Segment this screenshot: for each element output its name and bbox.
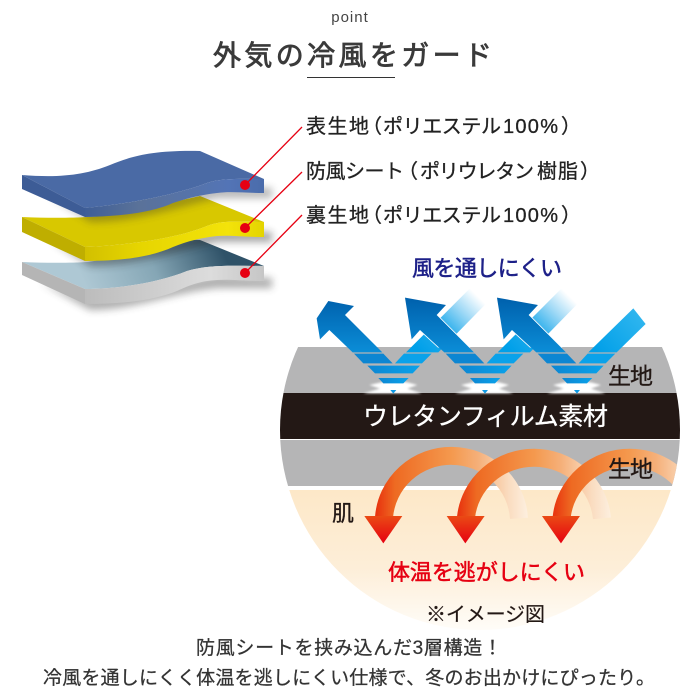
label: inner fabric layer: 生地 bbox=[608, 456, 653, 482]
note: image only: ※イメージ図 bbox=[426, 604, 545, 626]
layer label: wind-proof sheet: ポリウレタン bbox=[420, 160, 534, 183]
heat arrow 3 bbox=[542, 458, 698, 543]
layer label: outer fabric: 表生地 bbox=[306, 115, 369, 138]
cross-section diagram bbox=[270, 287, 698, 632]
illustration: three fabric layers bbox=[22, 127, 302, 310]
leader line: outer fabric bbox=[240, 127, 302, 190]
arrow group 3 bbox=[497, 298, 646, 394]
title underline bbox=[307, 77, 395, 78]
heading: blocks wind: 風を通しにくい bbox=[412, 256, 562, 281]
leader line: back fabric bbox=[240, 215, 302, 278]
layer: wind-proof sheet (yellow) bbox=[22, 196, 272, 266]
label: urethane film: ウレタンフィルム素材 bbox=[363, 403, 608, 431]
layer: outer fabric (blue) bbox=[22, 151, 272, 222]
heading: retains body heat: 体温を逃がしにくい bbox=[388, 560, 585, 585]
layer label: outer fabric: ポリエステル bbox=[383, 115, 501, 138]
layer label: back fabric: ポリエステル bbox=[383, 204, 501, 227]
layer label: wind-proof sheet bbox=[306, 160, 600, 183]
layer label: back fabric: （ bbox=[362, 204, 382, 227]
layer label: wind-proof sheet: 防風シート bbox=[306, 160, 404, 183]
caption line 2: 冷風を通しにくく体温を逃しにくい仕様で、冬のお出かけにぴったり。 bbox=[43, 667, 655, 689]
body heat arrows curving back bbox=[364, 456, 698, 543]
label: skin: 肌 bbox=[332, 501, 354, 526]
caption line 1: 防風シートを挟み込んだ3層構造！ bbox=[196, 637, 502, 659]
layer label: outer fabric bbox=[306, 115, 581, 138]
heat arrow 1 bbox=[364, 456, 519, 543]
label: point: point bbox=[331, 9, 369, 26]
label: outer fabric layer: 生地 bbox=[608, 363, 653, 389]
title: 外気の冷風をガード bbox=[213, 40, 492, 71]
arrow group 1 bbox=[317, 287, 487, 394]
leader line: wind-proof sheet bbox=[240, 172, 302, 233]
layer label: back fabric: 裏生地 bbox=[306, 204, 369, 227]
layer label: back fabric: ） bbox=[561, 204, 581, 227]
layer label: back fabric bbox=[306, 204, 581, 227]
layer label: back fabric: 100% bbox=[503, 205, 558, 227]
layer label: outer fabric: ） bbox=[561, 115, 581, 138]
layer label: outer fabric: 100% bbox=[503, 116, 558, 138]
layer: back fabric (grey) bbox=[22, 240, 272, 310]
wind arrows bouncing off film bbox=[317, 287, 646, 394]
layer label: outer fabric: （ bbox=[362, 115, 382, 138]
layer label: wind-proof sheet: （ bbox=[398, 160, 418, 183]
layer label: wind-proof sheet: 樹脂 bbox=[537, 160, 578, 183]
heat arrow 2 bbox=[447, 458, 602, 543]
cross-section layers bbox=[270, 347, 690, 632]
layer label: wind-proof sheet: ） bbox=[580, 160, 600, 183]
arrow group 2 bbox=[405, 287, 579, 394]
